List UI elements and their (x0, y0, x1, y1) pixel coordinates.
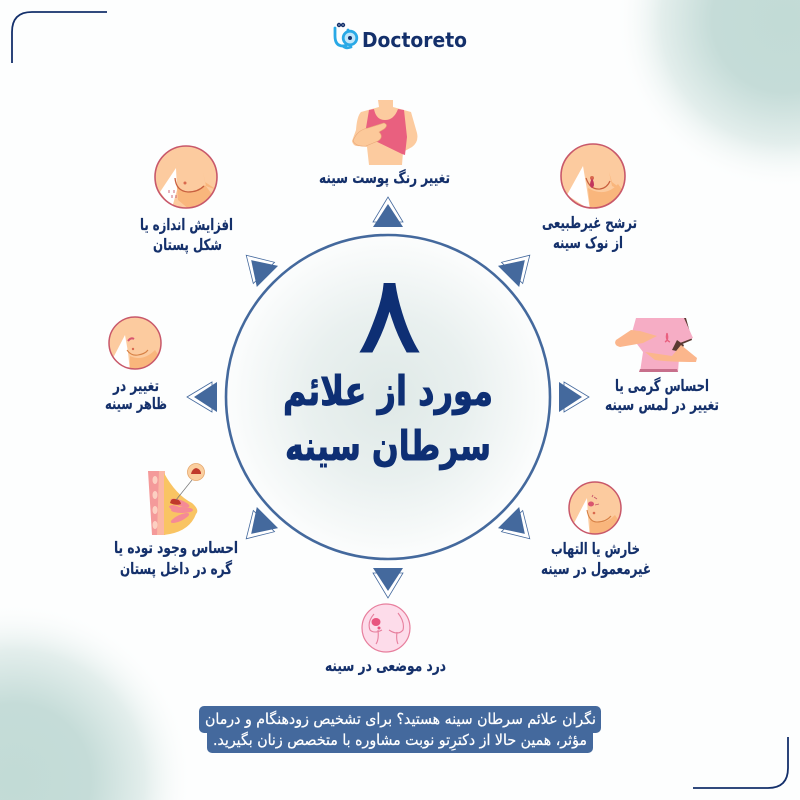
label: شکل پستان (153, 236, 222, 255)
symptom: localized pain (325, 604, 446, 675)
symptom: itching or inflammation (541, 482, 651, 578)
symptom: size or shape change (140, 146, 233, 255)
logo wordmark: Doctoreto (362, 28, 467, 52)
arrow: top (373, 197, 403, 227)
label (140, 216, 233, 255)
label: تغییر در (112, 377, 159, 395)
call to action banner: مؤثر، همین حالا از دکترِتو نوبت مشاوره با متخصص زنان بگیرید. (213, 731, 587, 752)
logo (335, 24, 467, 52)
icon: breast size change (155, 146, 220, 210)
label: درد موضعی در سینه (325, 657, 446, 675)
icon: irritated breast (569, 482, 625, 538)
label: ترشح غیرطبیعی (542, 214, 637, 232)
label: غیرمعمول در سینه (541, 560, 651, 578)
symptom: warmth or touch change (605, 318, 719, 414)
title: مورد از علائم (283, 367, 493, 415)
label (114, 539, 238, 579)
label: تغییر در لمس سینه (605, 396, 719, 414)
corner frame: bottom right (693, 737, 788, 788)
label: گره در داخل پستان (120, 559, 233, 579)
arrows (187, 197, 589, 598)
icon: breast with marks (109, 317, 165, 372)
label (605, 376, 719, 414)
call to action banner: نگران علائم سرطان سینه هستید؟ برای تشخیص زودهنگام و درمان (205, 710, 596, 728)
arrow: bottom (373, 568, 403, 598)
arrow: bottom right (498, 507, 540, 549)
corner frame: top left (12, 12, 107, 63)
arrow: top right (498, 245, 540, 287)
icon: stethoscope (335, 24, 357, 48)
label (542, 214, 637, 252)
numeral: ۸ (357, 253, 422, 378)
symptom: abnormal discharge (542, 144, 637, 252)
label: احساس گرمی یا (615, 376, 709, 395)
icon: nipple discharge (561, 144, 630, 212)
arrow: right (559, 382, 589, 412)
label: تغییر رنگ پوست سینه (319, 169, 450, 188)
label: ظاهر سینه (105, 395, 167, 413)
call to action banner (199, 706, 601, 753)
label: افزایش اندازه یا (140, 216, 233, 234)
icon: woman in pink top (352, 100, 417, 165)
icon: breast anatomy lump (148, 464, 204, 535)
symptom: lump inside breast (114, 464, 238, 579)
label: احساس وجود توده یا (114, 539, 238, 557)
arrow: top left (236, 245, 278, 287)
arrow: bottom left (236, 507, 278, 549)
arrow: left (187, 382, 217, 412)
label: خارش یا التهاب (551, 540, 640, 558)
title (283, 367, 493, 470)
icon: woman with ribbon (615, 318, 697, 372)
label (541, 540, 651, 578)
label (105, 377, 167, 413)
symptom: change in appearance (105, 317, 167, 413)
central circle (226, 235, 550, 559)
label: از نوک سینه (553, 234, 623, 252)
title: سرطان سینه (285, 422, 491, 470)
icon: breasts with pain marks (362, 604, 410, 652)
symptom: skin colour change (319, 100, 450, 188)
